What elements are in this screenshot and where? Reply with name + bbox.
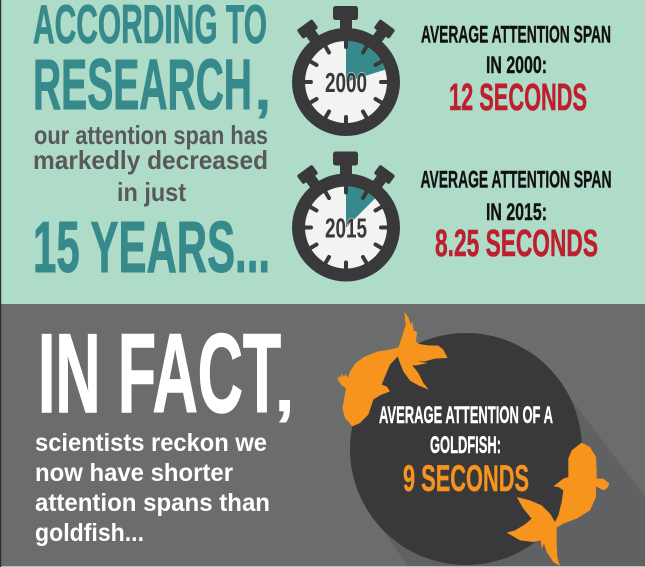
text block: shorter attention spans than goldfish: now have shorter [35,459,233,487]
panel: goldfish comparison [0,304,645,567]
icon: stopwatch 2000 [292,6,400,136]
text block: attention span decrease: in just [117,177,186,207]
callout: attention span in 2015 [420,166,612,265]
heading: according to research: RESEARCH [33,46,252,125]
text block: attention span decrease [33,120,268,207]
text block: shorter attention spans than goldfish: scientists reckon we [35,429,267,457]
heading: according to research [33,0,271,125]
heading: in fact: , [274,347,295,427]
callout: average attention of a goldfish: GOLDFISH: [430,432,501,459]
icon: stopwatch 2015 [292,152,400,282]
heading: according to research: , [254,55,271,122]
text block: attention span decrease: our attention span has [34,120,268,150]
left edge line [0,0,1,567]
circle badge [350,333,582,565]
callout: attention span in 2015: IN 2015: [486,199,547,226]
heading: in fact [38,311,295,436]
text block: shorter attention spans than goldfish: goldfish... [35,519,144,547]
icon: stopwatch 2015: 2015 [325,212,367,244]
long shadow of circle [380,400,645,566]
text block: shorter attention spans than goldfish [35,429,270,547]
text block: shorter attention spans than goldfish: attention spans than [35,489,270,517]
icon: goldfish bottom [507,443,609,566]
callout: average attention of a goldfish [379,402,553,499]
callout: attention span in 2000: IN 2000: [486,52,547,79]
callout: attention span in 2000 [421,22,611,119]
heading: in fact: IN FACT [38,311,281,436]
panel: research on attention span [0,0,645,304]
heading: 15 years: 15 YEARS... [33,208,270,288]
icon: stopwatch 2000: 2000 [325,67,367,98]
text block: attention span decrease: markedly decreased [33,145,268,175]
callout: average attention of a goldfish: 9 SECONDS [403,458,529,499]
icon: goldfish top [337,312,448,426]
